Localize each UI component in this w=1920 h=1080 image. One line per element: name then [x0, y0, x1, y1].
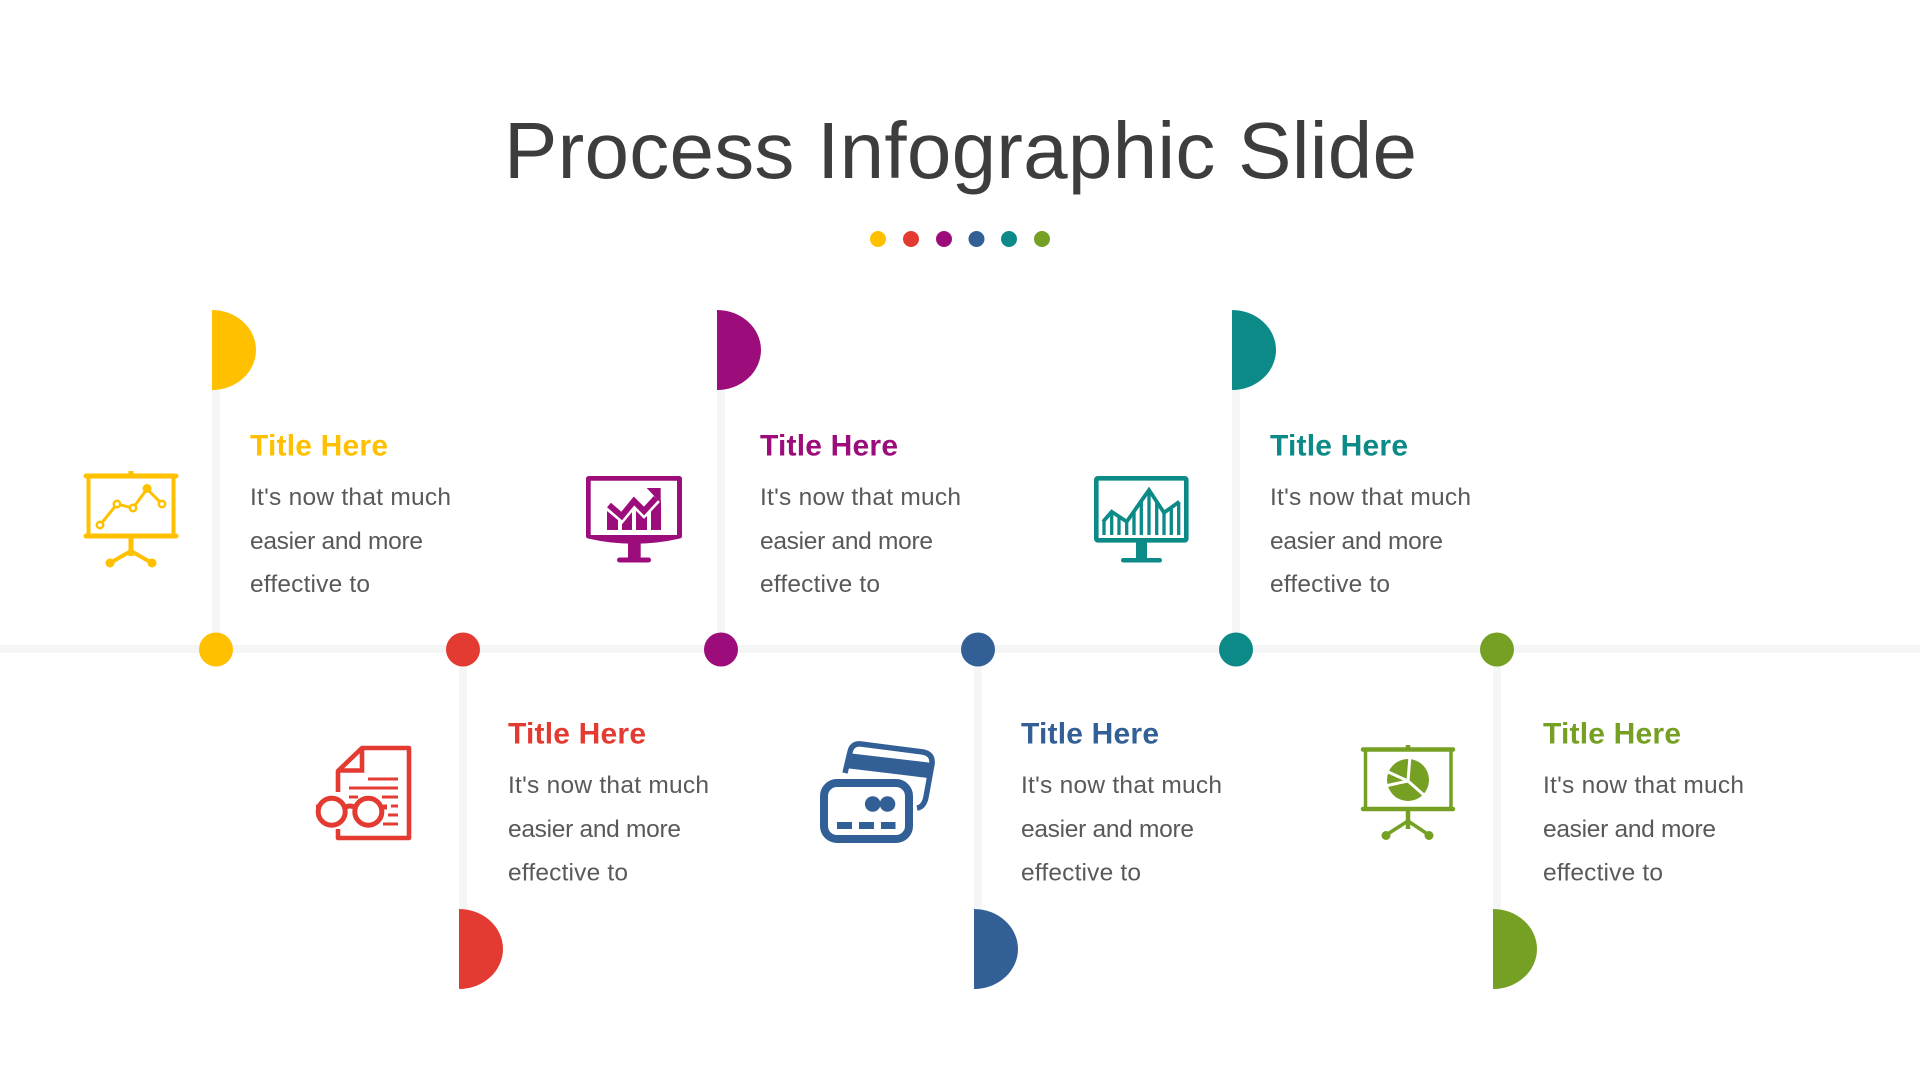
body text: effective to: [1543, 860, 1663, 886]
body text: effective to: [508, 860, 628, 886]
step 4: blue: [824, 632, 1222, 989]
body text: effective to: [1021, 860, 1141, 886]
body text: effective to: [1270, 571, 1390, 598]
body text: easier and more: [1543, 816, 1716, 843]
icon: presentation board line chart: [86, 471, 176, 568]
half circle marker: [459, 909, 503, 989]
half circle marker: [974, 909, 1018, 989]
stem: [212, 385, 220, 649]
step 2: red: [316, 632, 709, 989]
timeline dot: [961, 632, 995, 666]
half circle marker: [212, 310, 256, 390]
step 3: purple: [586, 310, 961, 666]
icon: credit cards: [824, 744, 933, 839]
icon: monitor with rising bars: [586, 476, 682, 562]
step 6: green: [1363, 632, 1744, 989]
step 1: yellow: [86, 310, 451, 666]
title: Process Infographic Slide: [504, 106, 1417, 195]
half circle marker: [1232, 310, 1276, 390]
icon: presentation board pie chart: [1363, 745, 1453, 840]
horizontal timeline: [0, 645, 1920, 653]
stem: [459, 649, 467, 914]
timeline dot: [1219, 632, 1253, 666]
body text: effective to: [760, 571, 880, 598]
colour dots row: [870, 231, 1050, 247]
body text: easier and more: [760, 528, 933, 555]
heading: Title Here: [760, 430, 898, 462]
body text: effective to: [250, 571, 370, 598]
body text: It's now that much: [250, 484, 451, 511]
timeline dot: [446, 632, 480, 666]
icon: document with glasses: [316, 748, 409, 838]
half circle marker: [717, 310, 761, 390]
heading: Title Here: [1270, 430, 1408, 462]
body text: [760, 484, 961, 598]
stem: [974, 649, 982, 914]
stem: [717, 385, 725, 649]
body text: easier and more: [1270, 528, 1443, 555]
step 5: teal: [1096, 310, 1471, 666]
heading: Title Here: [1021, 718, 1159, 750]
heading: Title Here: [250, 430, 388, 462]
body text: [1021, 772, 1222, 886]
body text: [250, 484, 451, 598]
timeline dot: [199, 632, 233, 666]
body text: easier and more: [250, 528, 423, 555]
heading: Title Here: [1543, 718, 1681, 750]
half circle marker: [1493, 909, 1537, 989]
body text: It's now that much: [1021, 772, 1222, 799]
stem: [1232, 385, 1240, 649]
heading: Title Here: [508, 718, 646, 750]
body text: [1543, 772, 1744, 886]
body text: It's now that much: [1270, 484, 1471, 511]
body text: It's now that much: [760, 484, 961, 511]
body text: [1270, 484, 1471, 598]
stem: [1493, 649, 1501, 914]
icon: monitor with area chart: [1096, 478, 1186, 562]
body text: easier and more: [1021, 816, 1194, 843]
body text: [508, 772, 709, 886]
body text: It's now that much: [1543, 772, 1744, 799]
body text: It's now that much: [508, 772, 709, 799]
timeline dot: [704, 632, 738, 666]
timeline dot: [1480, 632, 1514, 666]
body text: easier and more: [508, 816, 681, 843]
